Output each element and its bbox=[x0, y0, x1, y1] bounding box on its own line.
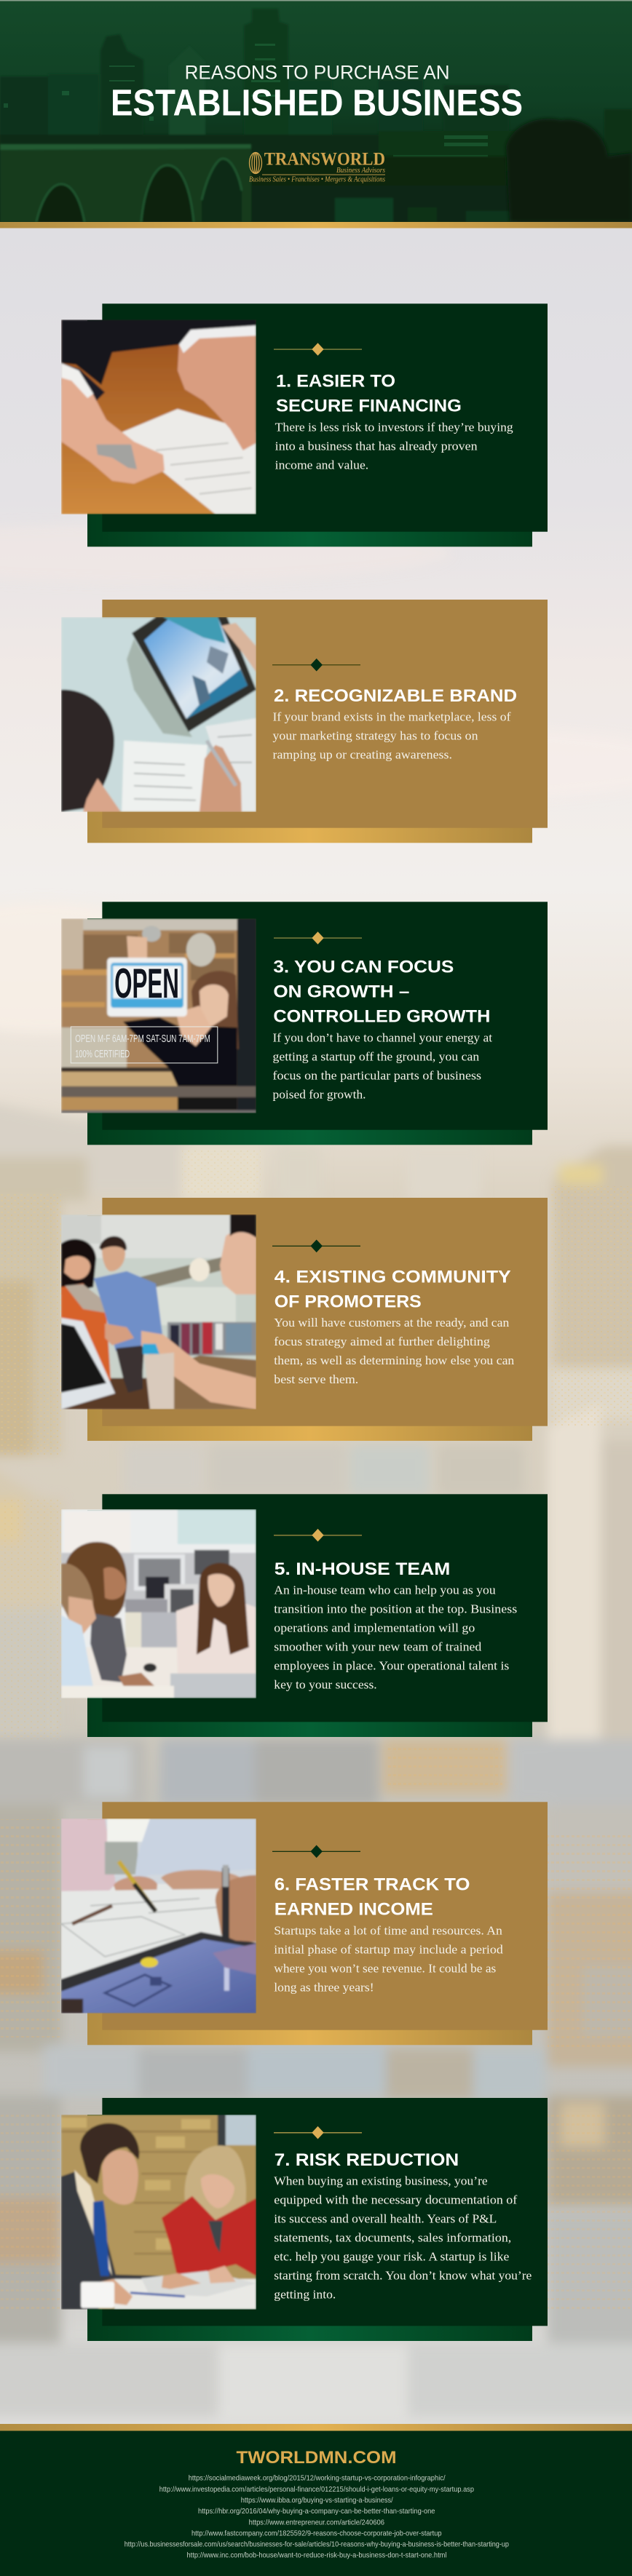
source links: https://hbr.org/2016/04/why-buying-a-company-can-be-better-than-starting-one bbox=[198, 2507, 435, 2516]
body text: focus strategy aimed at further delighting bbox=[274, 1335, 491, 1348]
header title line two: ESTABLISHED BUSINESS bbox=[111, 82, 523, 123]
panel 6: faster track to earned income bbox=[61, 1802, 548, 2045]
body text bbox=[274, 1923, 503, 1994]
body text bbox=[274, 1316, 515, 1386]
header gold band bbox=[0, 222, 632, 228]
photo: two advisors reviewing documents bbox=[61, 2115, 256, 2310]
body text: employees in place. Your operational talent is bbox=[274, 1659, 509, 1673]
body text bbox=[274, 1583, 517, 1692]
heading: 5. IN-HOUSE TEAM bbox=[274, 1559, 450, 1579]
heading: 1. EASIER TO bbox=[276, 372, 395, 391]
source links: https://socialmediaweek.org/blog/2015/12/working-startup-vs-corporation-infographic/ bbox=[189, 2474, 446, 2483]
source links: https://www.ibba.org/buying-vs-starting-a-business/ bbox=[241, 2496, 393, 2505]
body text: into a business that has already proven bbox=[275, 439, 478, 453]
heading: CONTROLLED GROWTH bbox=[273, 1007, 490, 1027]
panel 1: easier to secure financing bbox=[61, 303, 548, 546]
footer bbox=[0, 2424, 632, 2576]
panel 2: recognizable brand bbox=[61, 600, 548, 843]
body text: its success and overall health. Years of P&L bbox=[274, 2212, 497, 2226]
ornament bbox=[272, 659, 360, 671]
body text: long as three years! bbox=[274, 1980, 374, 1994]
bridge bbox=[0, 144, 521, 222]
ornament bbox=[274, 343, 362, 356]
body text: There is less risk to investors if they’re buying bbox=[275, 420, 513, 434]
body text: When buying an existing business, you’re bbox=[274, 2174, 488, 2188]
source links bbox=[125, 2474, 509, 2560]
body text: transition into the position at the top. Business bbox=[274, 1602, 517, 1616]
building lights bbox=[4, 44, 488, 157]
body text: key to your success. bbox=[274, 1678, 377, 1692]
heading: OF PROMOTERS bbox=[274, 1292, 422, 1311]
ornament bbox=[274, 2126, 362, 2139]
body text: income and value. bbox=[275, 458, 368, 472]
body text: If you don’t have to channel your energy at bbox=[272, 1030, 492, 1044]
ornament bbox=[274, 1529, 362, 1541]
panel 4: existing community of promoters bbox=[61, 1198, 548, 1441]
heading bbox=[274, 1875, 470, 1919]
body text: smoother with your new team of trained bbox=[274, 1640, 482, 1654]
body text: ramping up or creating awareness. bbox=[272, 748, 452, 762]
heading: 3. YOU CAN FOCUS bbox=[273, 958, 454, 977]
panel 7: risk reduction bbox=[61, 2098, 548, 2341]
body text bbox=[275, 420, 513, 472]
heading: 4. EXISTING COMMUNITY bbox=[274, 1268, 511, 1287]
panel 5: in-house team bbox=[61, 1494, 548, 1737]
body text bbox=[272, 1030, 492, 1101]
body text: You will have customers at the ready, and can bbox=[274, 1316, 510, 1329]
heading bbox=[273, 958, 490, 1027]
logo: Transworld Business Advisors: Business Advisors bbox=[336, 167, 385, 175]
body text: poised for growth. bbox=[272, 1087, 366, 1101]
photo: three colleagues in an office bbox=[61, 1509, 256, 1698]
source links: http://us.businessesforsale.com/us/search/businesses-for-sale/articles/10-reasons-why-buying-a-business-is-better-than-starting-up bbox=[125, 2540, 509, 2549]
header banner bbox=[0, 0, 632, 222]
trees bbox=[506, 119, 632, 222]
logo: Transworld Business Advisors: TRANSWORLD bbox=[264, 148, 385, 169]
body text: If your brand exists in the marketplace, less of bbox=[272, 709, 511, 723]
source links: https://www.entrepreneur.com/article/240606 bbox=[249, 2518, 384, 2527]
body text: starting from scratch. You don’t know what you’re bbox=[274, 2269, 532, 2283]
body text bbox=[274, 2174, 532, 2302]
body text: getting a startup off the ground, you can bbox=[272, 1049, 480, 1063]
heading bbox=[276, 372, 462, 416]
body text bbox=[272, 709, 511, 762]
photo: woman hanging OPEN sign bbox=[61, 918, 256, 1113]
logo: Transworld Business Advisors bbox=[249, 148, 385, 183]
body text: statements, tax documents, sales information, bbox=[274, 2231, 511, 2245]
logo: Transworld Business Advisors: Business Sales • Franchises • Mergers & Acquisitions bbox=[249, 176, 385, 183]
body text: where you won’t see revenue. It could be as bbox=[274, 1961, 496, 1975]
body text: getting into. bbox=[274, 2288, 336, 2302]
body text: focus on the particular parts of business bbox=[272, 1068, 481, 1082]
photo: woman hanging OPEN sign: OPEN bbox=[114, 961, 179, 1007]
source links: http://www.fastcompany.com/1825592/9-reasons-choose-corporate-job-over-startup bbox=[191, 2529, 442, 2538]
photo: man signing papers beside tablet bbox=[61, 617, 256, 812]
ornament bbox=[272, 1845, 360, 1858]
source links: http://www.inc.com/bob-house/want-to-reduce-risk-buy-a-business-don-t-start-one.html bbox=[186, 2551, 447, 2560]
photo: customers paying at a boutique counter bbox=[61, 1215, 256, 1410]
photo: hands with pens over plans and tablet bbox=[61, 1818, 256, 2014]
body text: best serve them. bbox=[274, 1372, 358, 1386]
skyline buildings bbox=[0, 9, 632, 171]
header title line one: REASONS TO PURCHASE AN bbox=[185, 61, 450, 83]
body text: your marketing strategy has to focus on bbox=[272, 729, 478, 743]
photo: hands holding keys over contract bbox=[61, 319, 256, 514]
website address: TWORLDMN.COM bbox=[236, 2448, 396, 2468]
body text: etc. help you gauge your risk. A startup is like bbox=[274, 2250, 509, 2264]
ornament bbox=[272, 1240, 360, 1252]
heading: EARNED INCOME bbox=[274, 1899, 433, 1919]
body text: An in-house team who can help you as you bbox=[274, 1583, 496, 1597]
heading: 6. FASTER TRACK TO bbox=[274, 1875, 470, 1894]
heading: 7. RISK REDUCTION bbox=[274, 2150, 459, 2170]
ornament bbox=[274, 931, 362, 945]
body text: equipped with the necessary documentation of bbox=[274, 2193, 518, 2207]
heading bbox=[274, 1268, 511, 1311]
body text: Startups take a lot of time and resources. An bbox=[274, 1923, 503, 1937]
photo: woman hanging OPEN sign: 100% CERTIFIED bbox=[75, 1048, 130, 1060]
body text: initial phase of startup may include a period bbox=[274, 1942, 503, 1956]
heading: ON GROWTH – bbox=[273, 982, 409, 1002]
heading: 2. RECOGNIZABLE BRAND bbox=[274, 686, 517, 706]
panel 3: focus on growth bbox=[61, 902, 548, 1145]
body text: them, as well as determining how else you can bbox=[274, 1353, 515, 1367]
source links: http://www.investopedia.com/articles/personal-finance/012215/should-i-get-loans-or-equity-my-startup.asp bbox=[159, 2485, 474, 2494]
body text: operations and implementation will go bbox=[274, 1621, 475, 1635]
heading: SECURE FINANCING bbox=[276, 396, 462, 416]
